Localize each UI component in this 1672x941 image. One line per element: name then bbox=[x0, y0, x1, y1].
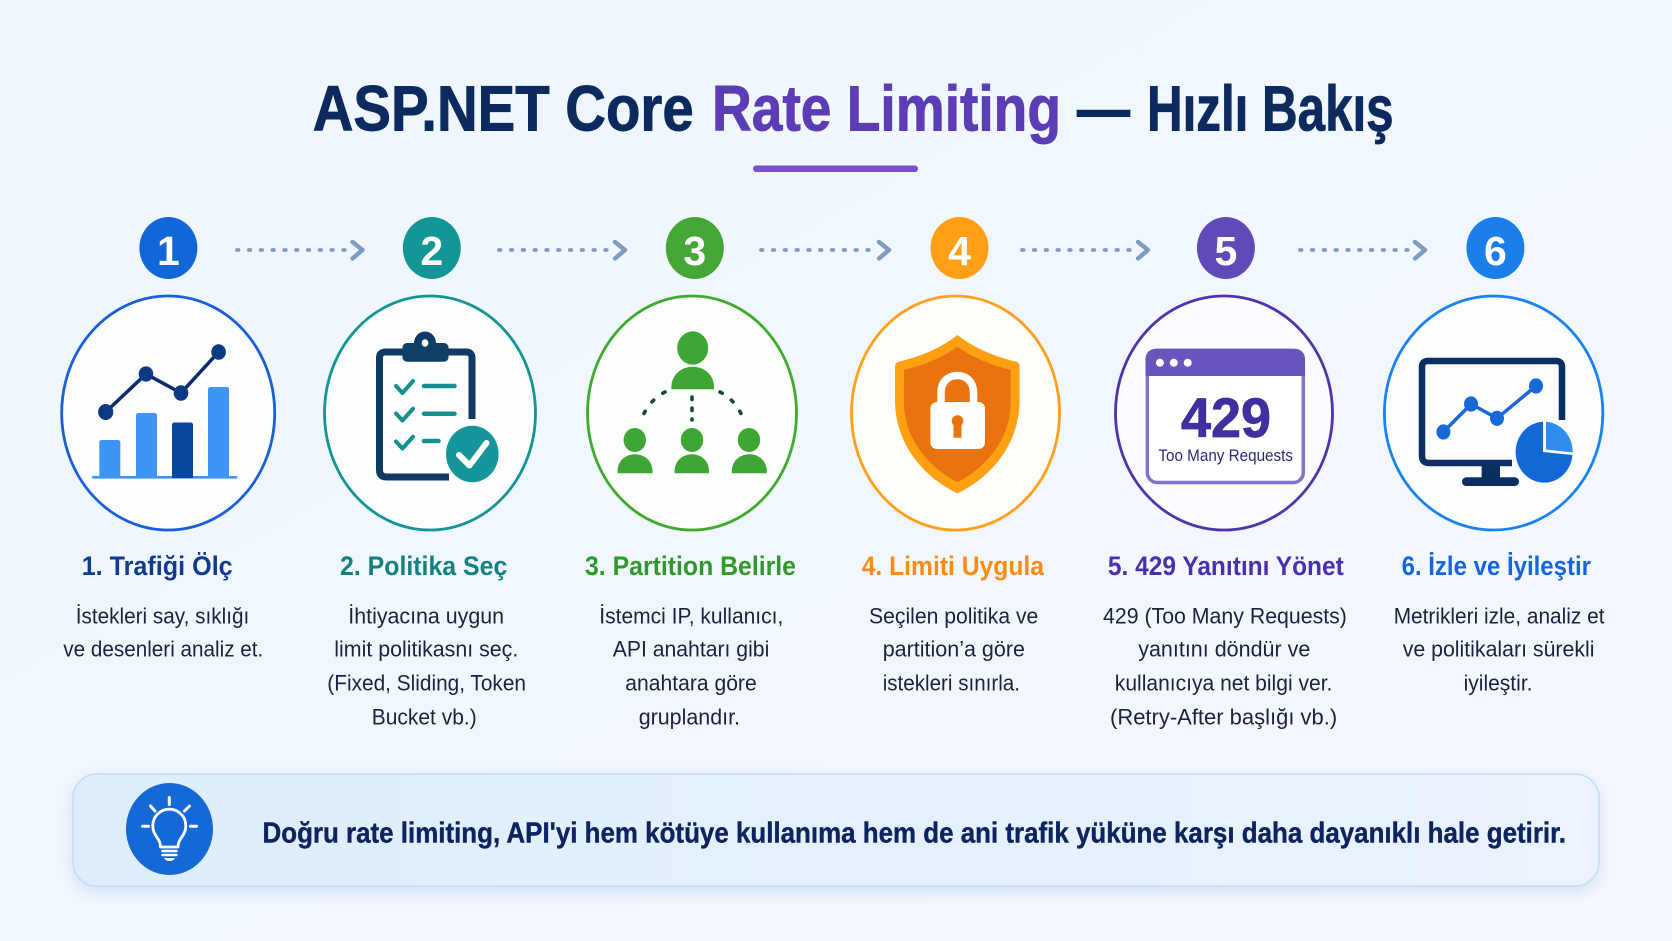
step 4 description bbox=[869, 603, 1038, 696]
step 4 description: partition’a göre bbox=[883, 637, 1025, 662]
icon: 429 browser window: Too Many Requests bbox=[1158, 446, 1293, 465]
step 6 heading: 6. İzle ve İyileştir bbox=[1402, 551, 1591, 581]
step 6 description: iyileştir. bbox=[1464, 671, 1532, 696]
panel: step 6 monitor and improve bbox=[1384, 217, 1604, 696]
icon circle 2 bbox=[324, 296, 536, 530]
step 5 description: (Retry-After başlığı vb.) bbox=[1110, 704, 1337, 729]
step 5 description: kullanıcıya net bilgi ver. bbox=[1115, 671, 1332, 696]
step 1 description: ve desenleri analiz et. bbox=[63, 637, 263, 662]
icon circle 5 bbox=[1116, 296, 1332, 530]
number badge 6: 6 bbox=[1484, 228, 1507, 274]
number badge 3 bbox=[666, 217, 724, 279]
number badge 6 bbox=[1466, 217, 1524, 279]
step 5 description bbox=[1103, 603, 1347, 729]
title underline bbox=[753, 166, 918, 172]
number badge 5 bbox=[1197, 217, 1255, 279]
arrow: step 3 to 4 bbox=[761, 242, 889, 258]
step 4 description: Seçilen politika ve bbox=[869, 603, 1038, 628]
number badge 4 bbox=[930, 217, 988, 279]
title: ASP.NET Core bbox=[313, 72, 694, 144]
number badge 4: 4 bbox=[948, 228, 971, 274]
number badge 2 bbox=[403, 217, 461, 279]
arrow: step 2 to 3 bbox=[499, 242, 625, 258]
step 3 description: İstemci IP, kullanıcı, bbox=[599, 603, 783, 628]
step 2 description bbox=[327, 603, 526, 729]
step 2 heading: 2. Politika Seç bbox=[340, 551, 507, 581]
arrow: step 4 to 5 bbox=[1022, 242, 1148, 258]
icon: clipboard with check bbox=[380, 332, 502, 486]
icon circle 4 bbox=[852, 296, 1060, 530]
panel: step 5 handle 429 bbox=[1103, 217, 1347, 729]
step 1 description bbox=[63, 603, 263, 662]
panel: step 2 choose policy bbox=[324, 217, 536, 729]
callout banner bbox=[73, 774, 1599, 886]
title: — bbox=[1077, 72, 1130, 144]
step 5 heading: 5. 429 Yanıtını Yönet bbox=[1108, 551, 1344, 581]
step 1 heading: 1. Trafiği Ölç bbox=[82, 551, 233, 581]
number badge 2: 2 bbox=[420, 228, 443, 274]
number badge 3: 3 bbox=[683, 228, 706, 274]
title bbox=[313, 72, 1394, 144]
step 1 description: İstekleri say, sıklığı bbox=[76, 603, 249, 628]
icon: bar and line chart bbox=[92, 344, 238, 479]
number badge 1: 1 bbox=[157, 228, 180, 274]
step 6 description: Metrikleri izle, analiz et bbox=[1394, 603, 1604, 628]
title: Rate Limiting bbox=[712, 72, 1061, 144]
step 3 heading: 3. Partition Belirle bbox=[585, 551, 796, 581]
step 3 description bbox=[599, 603, 783, 729]
icon: light bulb bbox=[126, 783, 213, 875]
step 3 description: gruplandır. bbox=[639, 704, 740, 729]
step 5 description: yanıtını döndür ve bbox=[1138, 637, 1310, 662]
step 6 description bbox=[1394, 603, 1604, 696]
arrow: step 5 to 6 bbox=[1300, 242, 1425, 258]
number badge 1 bbox=[139, 217, 197, 279]
panel: step 4 apply limit bbox=[852, 217, 1060, 696]
icon: 429 browser window bbox=[1146, 349, 1305, 482]
step 5 description: 429 (Too Many Requests) bbox=[1103, 603, 1347, 628]
icon: user partition tree bbox=[618, 331, 767, 473]
icon circle 6 bbox=[1384, 296, 1603, 530]
step 2 description: limit politikasnı seç. bbox=[334, 637, 518, 662]
step 2 description: Bucket vb.) bbox=[372, 704, 477, 729]
number badge 5: 5 bbox=[1214, 228, 1237, 274]
icon: monitor with chart and pie bbox=[1422, 361, 1576, 486]
step 4 description: istekleri sınırla. bbox=[883, 671, 1020, 696]
panel: step 1 measure traffic bbox=[62, 217, 275, 662]
step 2 description: İhtiyacına uygun bbox=[348, 603, 504, 628]
arrow: step 1 to 2 bbox=[237, 242, 362, 258]
step 4 heading: 4. Limiti Uygula bbox=[862, 551, 1044, 581]
panel: step 3 determine partition bbox=[585, 217, 796, 729]
step 3 description: anahtara göre bbox=[625, 671, 757, 696]
icon: 429 browser window: 429 bbox=[1181, 386, 1271, 449]
title: Hızlı Bakış bbox=[1147, 72, 1394, 144]
step 2 description: (Fixed, Sliding, Token bbox=[327, 671, 526, 696]
icon: shield with lock bbox=[895, 335, 1020, 493]
step 3 description: API anahtarı gibi bbox=[613, 637, 769, 662]
icon circle 3 bbox=[588, 296, 796, 530]
step 6 description: ve politikaları sürekli bbox=[1403, 637, 1594, 662]
icon circle 1 bbox=[62, 296, 275, 530]
